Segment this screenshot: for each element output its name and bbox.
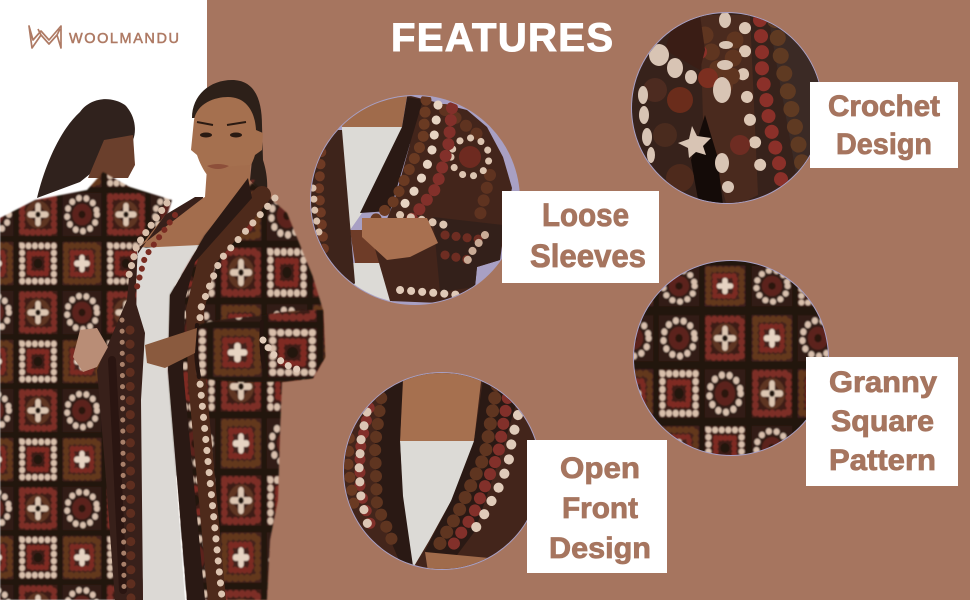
brown band xyxy=(195,195,262,600)
icon: logo mark xyxy=(29,26,61,48)
brand name: WOOLMANDU xyxy=(69,31,179,47)
title: FEATURES xyxy=(391,16,613,60)
white dress xyxy=(136,245,200,600)
white logo panel xyxy=(0,0,207,600)
circle: crochet design xyxy=(631,12,820,204)
coat front panel xyxy=(168,180,325,600)
logo xyxy=(29,26,179,48)
label: granny square pattern: Granny xyxy=(829,366,937,399)
label: granny square pattern: Square xyxy=(831,405,934,438)
back hair xyxy=(37,99,135,198)
hair xyxy=(192,80,267,198)
star xyxy=(678,126,711,158)
label: loose sleeves: Loose xyxy=(542,197,629,233)
model: back view xyxy=(0,99,172,600)
circle: granny square pattern xyxy=(633,260,829,456)
label: granny square pattern: Pattern xyxy=(829,444,936,477)
sleeve xyxy=(197,310,325,382)
model: front view xyxy=(73,80,325,600)
back coat xyxy=(0,172,172,600)
face and neck xyxy=(191,97,263,185)
label: crochet design: Design xyxy=(836,128,932,161)
coat left panel xyxy=(97,197,203,600)
hands xyxy=(73,328,108,372)
cream stitches xyxy=(200,198,275,598)
label: loose sleeves: Sleeves xyxy=(530,238,646,274)
label: crochet design: Crochet xyxy=(828,90,940,123)
circle: loose sleeves xyxy=(300,90,520,308)
circle: open front design xyxy=(343,372,536,570)
label: loose sleeves xyxy=(502,191,659,283)
label: open front design: Open xyxy=(560,452,640,485)
dark lapel xyxy=(168,178,252,600)
label: granny square pattern xyxy=(806,357,958,486)
label: open front design: Front xyxy=(562,492,638,525)
label: open front design: Design xyxy=(549,532,651,565)
label: open front design xyxy=(527,440,667,573)
label: crochet design xyxy=(810,82,958,168)
eyes and mouth xyxy=(197,122,246,125)
cream petals xyxy=(638,12,734,193)
back neck xyxy=(88,135,135,178)
